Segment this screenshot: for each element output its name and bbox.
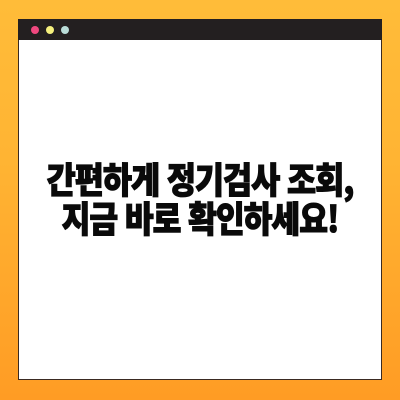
icon: yellow window dot <box>46 26 54 34</box>
heading: second line: 지금 바로 확인하세요! <box>62 191 338 243</box>
title bar <box>18 19 382 40</box>
heading: first line: 간편하게 정기검사 조회, <box>47 152 353 204</box>
icon: pink window dot <box>30 26 38 34</box>
icon: pale blue window dot <box>60 26 68 34</box>
